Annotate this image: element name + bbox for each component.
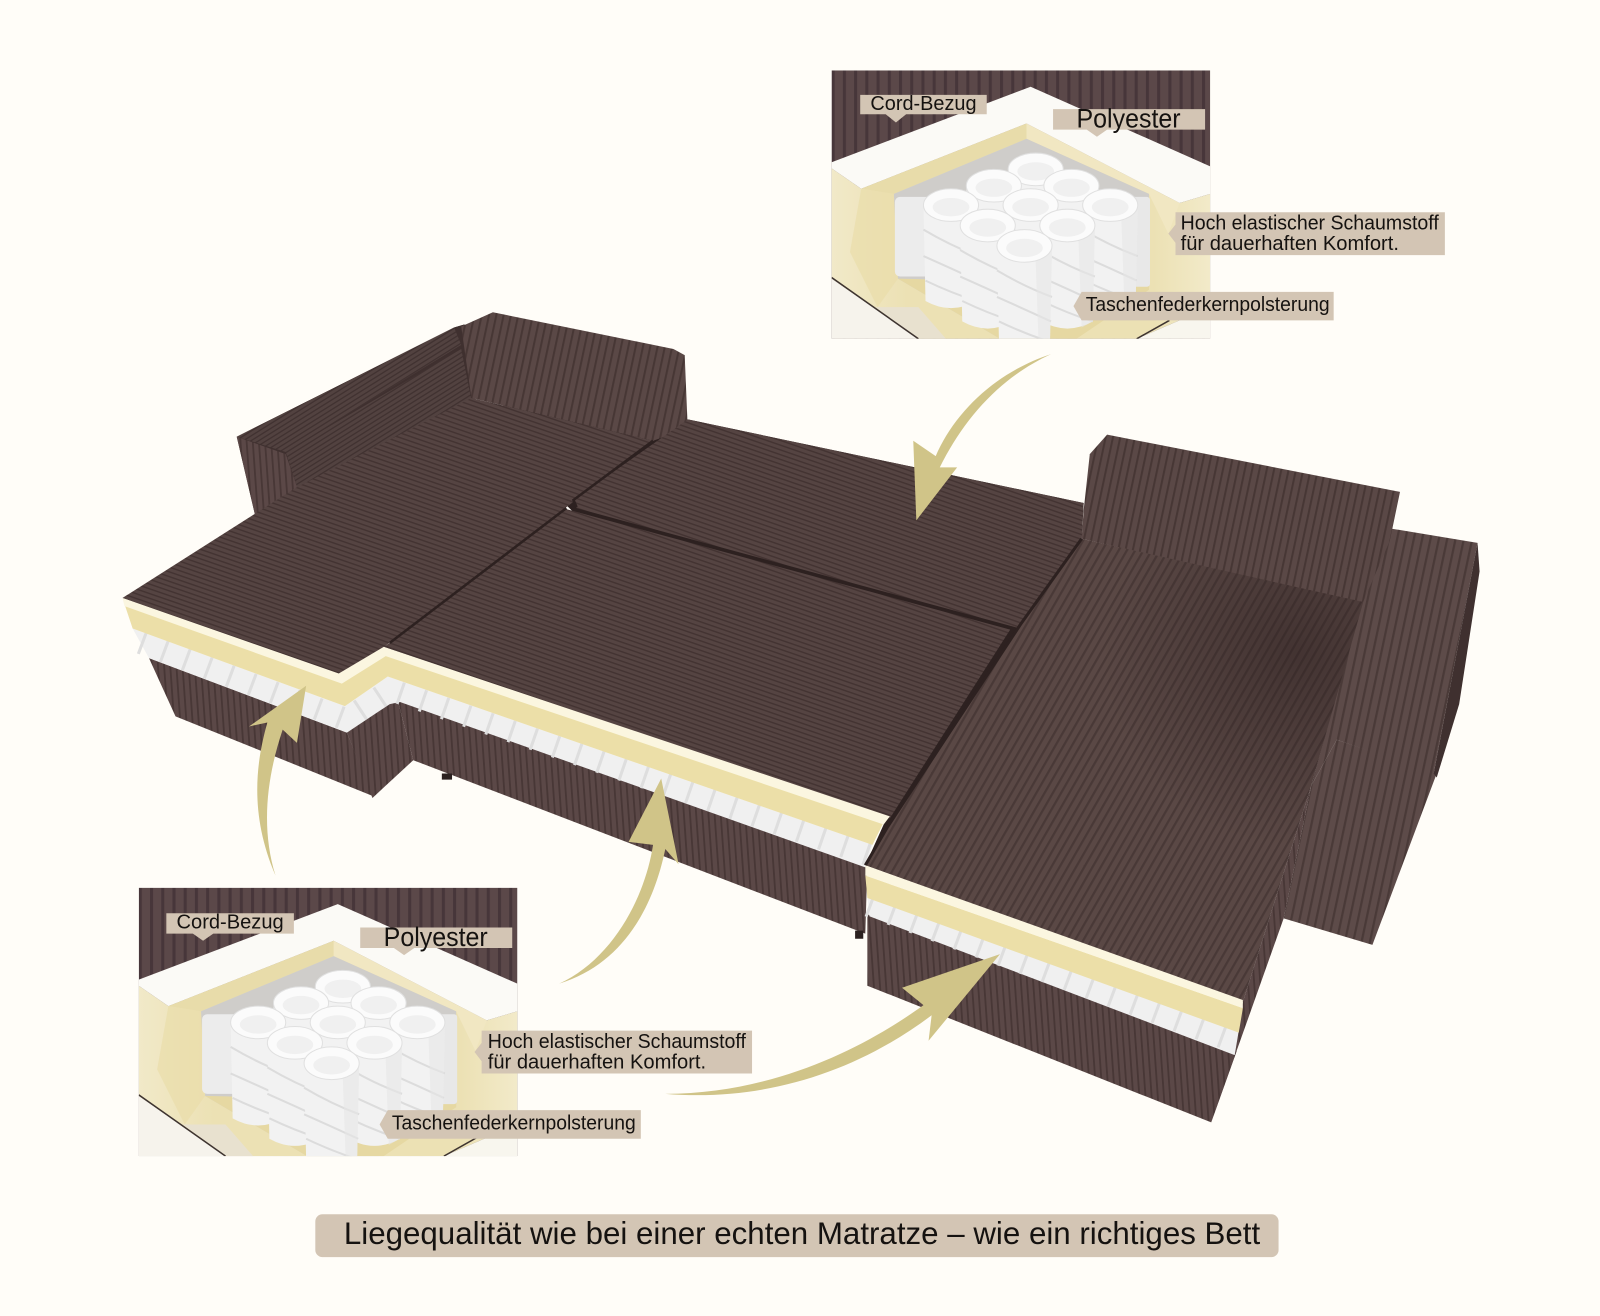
notch column [347, 682, 413, 798]
dark seam underlay [454, 324, 1084, 865]
label: Polyester: Polyester [1077, 104, 1181, 134]
arrow: to right section [665, 954, 1000, 1095]
feet [442, 773, 863, 939]
left mattress section [122, 598, 890, 867]
arrow: to middle section [559, 779, 679, 984]
cross-section illustration [832, 70, 1210, 349]
label: foam: Hoch elastischer Schaumstoff [1181, 213, 1439, 235]
caption banner: Liegequalität wie bei einer echten Matratze – wie ein richtiges Bett [344, 1215, 1260, 1251]
label: foam [474, 1031, 752, 1073]
label: foam: für dauerhaften Komfort. [488, 1051, 706, 1073]
right chaise base [867, 914, 1237, 1122]
panel: lower mattress cross-section [139, 888, 752, 1166]
label: Cord-Bezug: Cord-Bezug [870, 93, 977, 115]
right armrest [1284, 526, 1480, 945]
label: Cord-Bezug: Cord-Bezug [177, 912, 284, 934]
cross-section illustration [139, 888, 517, 1166]
left armrest and back [237, 312, 688, 515]
right chaise side [1211, 786, 1311, 1122]
middle back cushion [573, 419, 1084, 629]
panel: upper mattress cross-section [832, 70, 1445, 349]
left chaise base [149, 658, 372, 796]
label: pocket springs: Taschenfederkernpolsterung [392, 1113, 636, 1135]
seams [390, 441, 653, 643]
right mattress section [865, 865, 1243, 1055]
label: foam: Hoch elastischer Schaumstoff [488, 1031, 746, 1053]
arrow: to upper inset [913, 354, 1051, 520]
label: Polyester: Polyester [384, 922, 488, 952]
sofa [122, 312, 1480, 1122]
label: Polyester [360, 922, 512, 955]
right backrest [1082, 435, 1400, 604]
middle front cushion [384, 509, 1010, 818]
label: pocket springs: Taschenfederkernpolsterung [1086, 294, 1330, 316]
middle base [393, 682, 867, 934]
label: Cord-Bezug [860, 93, 987, 122]
left chaise seat [122, 398, 653, 675]
label: Polyester [1053, 104, 1205, 137]
arrow: to left section [249, 686, 306, 875]
right chaise seat [865, 539, 1363, 1002]
label: foam: für dauerhaften Komfort. [1181, 233, 1399, 255]
label: Cord-Bezug [166, 912, 294, 941]
label: foam [1168, 212, 1445, 255]
